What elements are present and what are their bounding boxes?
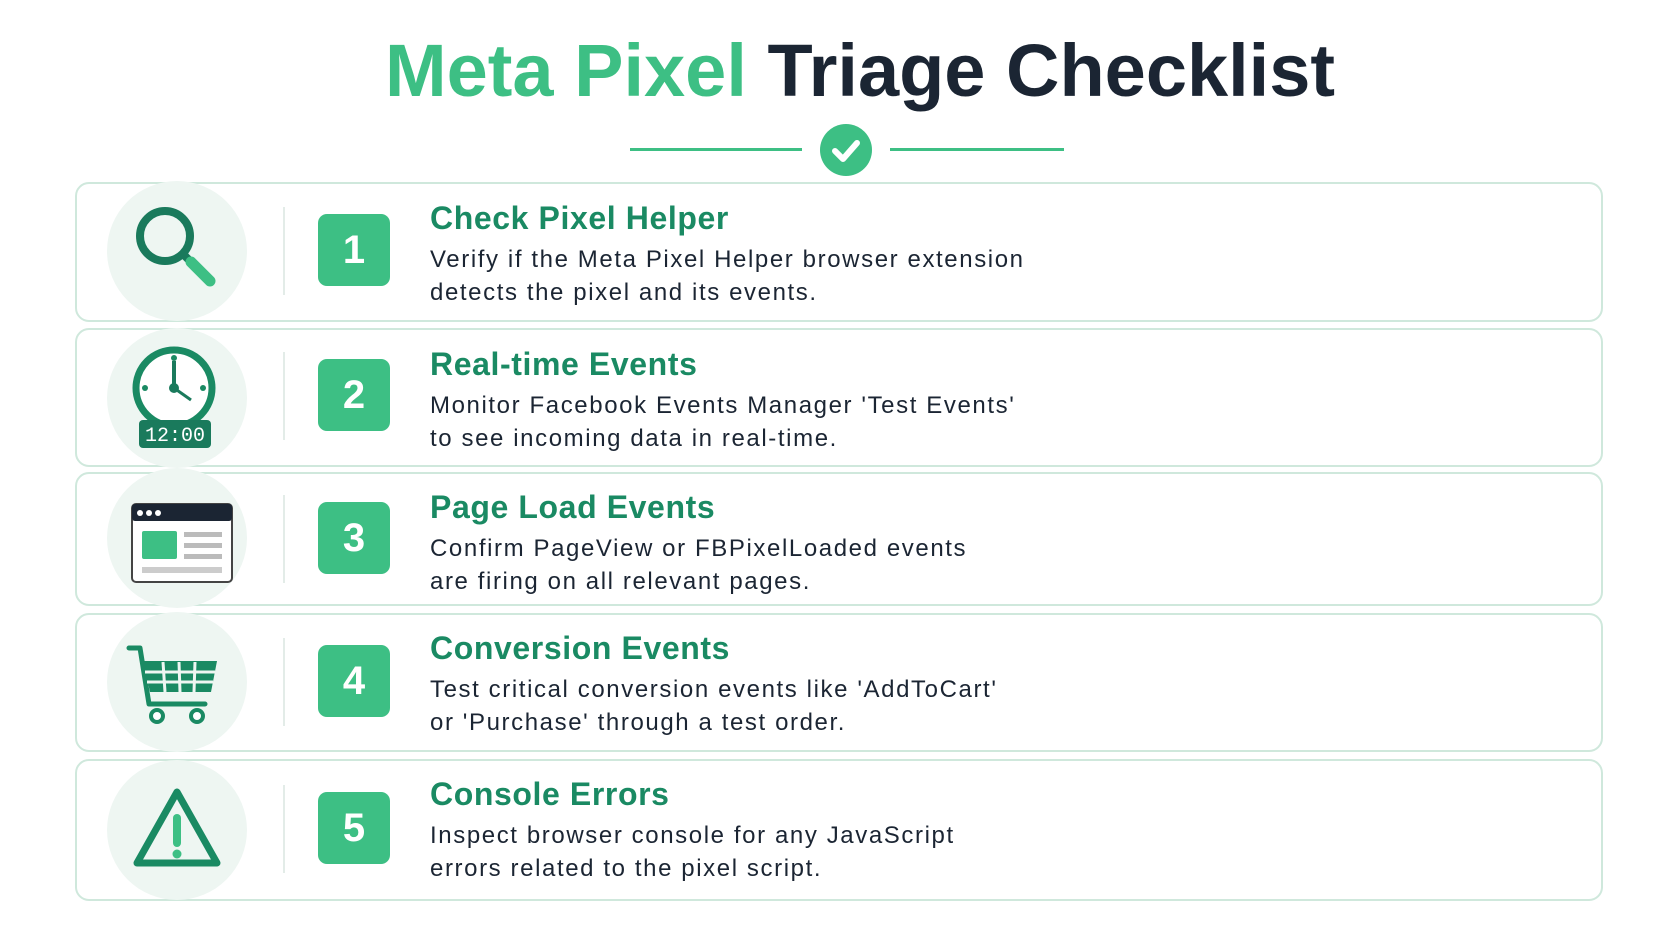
number 1: 1 [343, 228, 365, 272]
icon: magnifier [107, 181, 247, 321]
heading 1: Check Pixel Helper [430, 200, 729, 236]
panel: step 1 [75, 182, 1603, 322]
number 4: 4 [343, 659, 365, 703]
number 3: 3 [343, 516, 365, 560]
heading 5: Console Errors [430, 776, 670, 812]
panel: step 3 [75, 472, 1603, 606]
description 4: or 'Purchase' through a test order. [430, 709, 846, 736]
description 3 [430, 535, 967, 595]
panel: step 2 [75, 328, 1603, 467]
description 5 [430, 822, 955, 882]
number 1 [318, 214, 390, 286]
icon: clock [107, 328, 247, 468]
description 1 [430, 246, 1025, 306]
title: Meta Pixel Triage Checklist [385, 29, 1335, 112]
description 5: errors related to the pixel script. [430, 855, 822, 882]
number 3 [318, 502, 390, 574]
description 4 [430, 676, 998, 736]
description 4: Test critical conversion events like 'AddToCart' [430, 676, 998, 703]
divider with check icon [630, 124, 1064, 176]
heading 3: Page Load Events [430, 489, 715, 525]
number 2: 2 [343, 373, 365, 417]
icon: cart [107, 612, 247, 752]
description 2: to see incoming data in real-time. [430, 425, 838, 452]
description 2: Monitor Facebook Events Manager 'Test Events' [430, 392, 1015, 419]
panel: step 4 [75, 613, 1603, 752]
heading 2: Real-time Events [430, 346, 697, 382]
description 1: Verify if the Meta Pixel Helper browser extension [430, 246, 1025, 273]
description 3: Confirm PageView or FBPixelLoaded events [430, 535, 967, 562]
number 4 [318, 645, 390, 717]
description 2 [430, 392, 1015, 452]
icon: browser page [107, 468, 247, 608]
description 5: Inspect browser console for any JavaScript [430, 822, 955, 849]
icon: warning [107, 760, 247, 900]
description 3: are firing on all relevant pages. [430, 568, 811, 595]
number 2 [318, 359, 390, 431]
icon: clock: 12:00 [145, 425, 205, 448]
number 5: 5 [343, 806, 365, 850]
heading 4: Conversion Events [430, 630, 730, 666]
number 5 [318, 792, 390, 864]
panel: step 5 [75, 759, 1603, 901]
description 1: detects the pixel and its events. [430, 279, 818, 306]
